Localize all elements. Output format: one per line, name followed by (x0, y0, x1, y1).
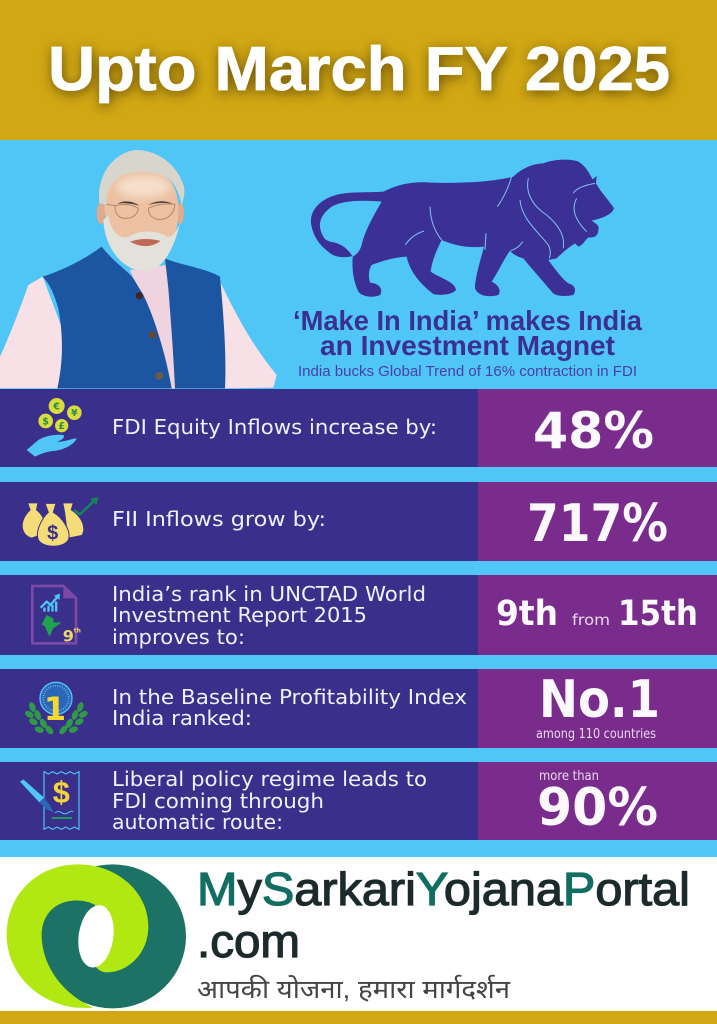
icon: coins over hand: ¥ (71, 408, 78, 419)
label: Investment Report 2015 (112, 603, 367, 627)
label: India’s rank in UNCTAD World (112, 582, 426, 606)
value: from (572, 611, 610, 629)
portrait of Prime Minister (0, 150, 277, 388)
domain: .com (197, 915, 300, 967)
shirt chest (130, 265, 176, 388)
brand name: MySarkariYojanaPortal (197, 863, 690, 915)
label: FDI coming through (112, 789, 324, 813)
value: among 110 countries (536, 727, 656, 742)
buttons (136, 292, 143, 299)
icon: report with India map (32, 586, 81, 646)
header band with title (0, 0, 717, 140)
icon: pen and receipt: $ (53, 775, 70, 809)
label: Liberal policy regime leads to (112, 767, 427, 791)
icon: report with India map: 9 (63, 627, 74, 646)
icon: report with India map: th (74, 627, 81, 634)
icon: coins over hand: $ (42, 416, 49, 427)
label: improves to: (112, 625, 245, 649)
value: 48% (533, 402, 654, 460)
shirt sleeves (0, 277, 277, 388)
label: automatic route: (112, 810, 283, 834)
footer (0, 857, 717, 1024)
row 5: liberal policy regime (0, 762, 717, 840)
icon: coins over hand (27, 398, 82, 457)
heading: Make In India: an Investment Magnet (320, 330, 615, 361)
row 3: UNCTAD rank (0, 575, 717, 655)
label: FDI Equity Inflows increase by: (112, 415, 437, 439)
hair (99, 150, 184, 205)
Hindi tagline: आपकी योजना, हमारा मार्गदर्शन (197, 974, 511, 1004)
value: 90% (537, 778, 658, 838)
icon: coins over hand: £ (58, 421, 65, 432)
heading: Make In India (293, 305, 642, 380)
row 2: FII inflows (0, 482, 717, 561)
label: FII Inflows grow by: (112, 507, 326, 531)
value: 15th (618, 594, 698, 634)
value: more than (539, 769, 599, 784)
icon: money bags with arrow: $ (47, 522, 58, 544)
icon: coins over hand: € (52, 401, 60, 412)
Make in India lion emblem (311, 160, 614, 297)
label (112, 685, 467, 730)
title: Upto March FY 2025 (48, 35, 670, 104)
icon: money bags with arrow (23, 497, 98, 546)
beard (103, 215, 180, 272)
label: India ranked: (112, 706, 252, 730)
row 1: FDI equity inflows (0, 389, 717, 467)
label (112, 767, 427, 834)
face (104, 170, 178, 267)
heading: Make In India: ‘Make In India’ makes India (293, 305, 642, 336)
subheading: India bucks Global Trend of 16% contraction in FDI (298, 363, 637, 380)
vest (43, 247, 225, 388)
row 4: Baseline Profitability Index (0, 669, 717, 748)
label: In the Baseline Profitability Index (112, 685, 467, 709)
value: 9th (496, 594, 558, 634)
ears (97, 203, 105, 224)
value: No.1 (539, 670, 660, 730)
icon: chakra with laurel: 1 (44, 690, 66, 728)
value: 717% (527, 494, 668, 554)
label (112, 582, 426, 649)
value (496, 594, 698, 634)
icon: pen and receipt (20, 772, 79, 829)
icon: chakra with laurel (24, 682, 89, 736)
logo mark (7, 864, 186, 1008)
glasses (107, 204, 175, 220)
